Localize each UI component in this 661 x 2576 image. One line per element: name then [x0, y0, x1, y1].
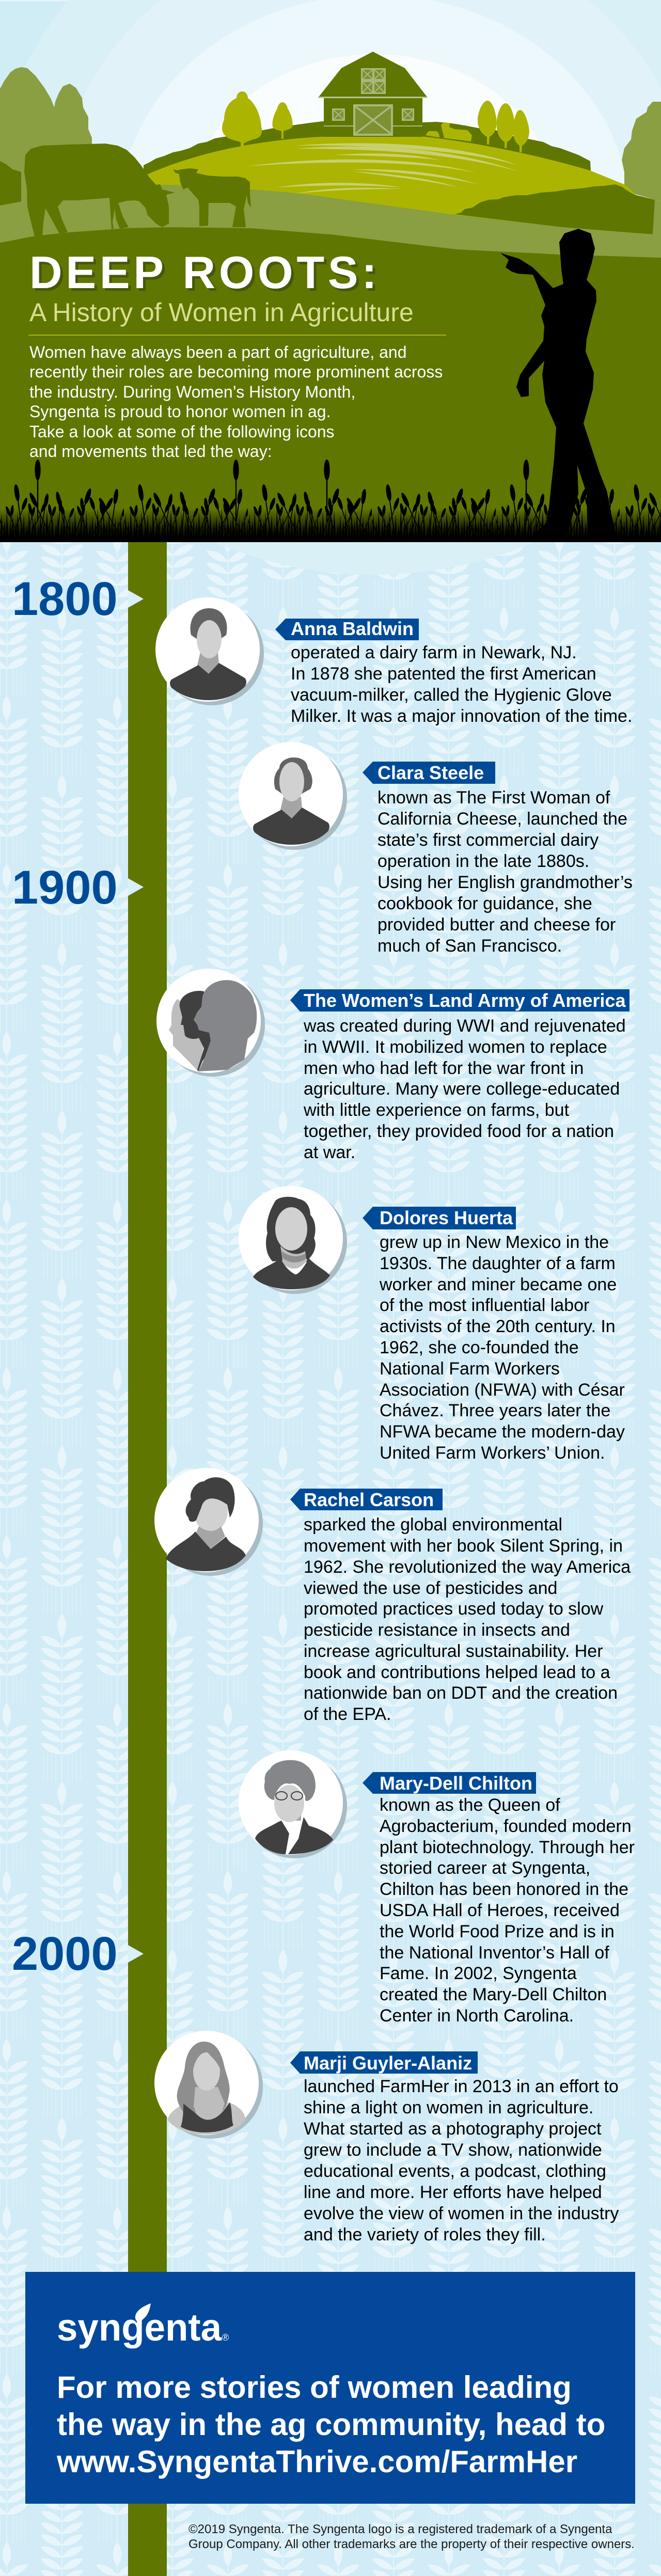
calf — [173, 168, 251, 227]
description: operation in the late 1880s. — [377, 851, 589, 871]
description: Center in North Carolina. — [380, 2006, 574, 2026]
back hedge on the hill — [144, 121, 591, 217]
description: agriculture. Many were college-educated — [304, 1079, 620, 1099]
year marker 1900: 1900 — [12, 861, 118, 914]
description: USDA Hall of Heroes, received — [380, 1901, 620, 1920]
name tag: Rachel Carson — [304, 1489, 434, 1510]
small distant animals — [426, 123, 472, 141]
description: Fame. In 2002, Syngenta — [380, 1964, 577, 1983]
description: grew up in New Mexico in the — [380, 1232, 609, 1252]
call to action panel — [25, 2272, 635, 2504]
barn loft window — [361, 68, 386, 94]
header farm scene — [0, 0, 661, 575]
description: Using her English grandmother’s — [377, 873, 633, 892]
description: 1962, she co-founded the — [380, 1338, 579, 1357]
description: National Farm Workers — [380, 1359, 560, 1379]
intro text: the industry. During Women’s History Month, — [29, 383, 355, 401]
description: book and contributions helped lead to a — [304, 1663, 610, 1682]
name tag: The Women’s Land Army of America — [304, 990, 626, 1011]
description: shine a light on women in agriculture. — [304, 2098, 593, 2117]
description: operated a dairy farm in Newark, NJ. — [291, 643, 577, 662]
left hedge — [0, 161, 21, 206]
lime hill field — [145, 136, 640, 245]
description: the World Food Prize and is in — [380, 1922, 615, 1941]
right background tree — [622, 102, 661, 201]
description: What started as a photography project — [304, 2119, 602, 2139]
Syngenta logo: syngenta — [57, 2306, 222, 2349]
barn — [318, 52, 428, 137]
description: much of San Francisco. — [377, 936, 562, 956]
description: worker and miner became one — [379, 1275, 617, 1294]
description: of the most influential labor — [380, 1295, 589, 1315]
description: activists of the 20th century. In — [380, 1317, 616, 1336]
call to action text: the way in the ag community, head to — [57, 2407, 605, 2442]
description: cookbook for guidance, she — [377, 894, 592, 913]
description: 1930s. The daughter of a farm — [380, 1254, 616, 1273]
description: Milker. It was a major innovation of the time. — [291, 706, 632, 726]
description: at war. — [304, 1143, 355, 1162]
year marker 2000: 2000 — [12, 1927, 118, 1980]
description: increase agricultural sustainability. Her — [304, 1641, 603, 1661]
call to action text — [56, 2370, 605, 2479]
entry: Clara Steele — [239, 742, 633, 956]
description: United Farm Workers’ Union. — [380, 1443, 605, 1463]
description: known as The First Woman of — [377, 788, 610, 808]
description: Association (NFWA) with César — [380, 1380, 625, 1400]
left background trees — [0, 67, 92, 248]
description: with little experience on farms, but — [303, 1100, 570, 1120]
intro text: recently their roles are becoming more prominent across — [29, 362, 443, 381]
description — [304, 2077, 619, 2245]
portrait: Mary-Dell Chilton — [239, 1750, 347, 1858]
description: and the variety of roles they fill. — [304, 2225, 546, 2245]
name tag: Marji Guyler-Alaniz — [304, 2052, 472, 2074]
title: DEEP ROOTS: — [32, 249, 383, 301]
trees right of barn — [478, 101, 529, 152]
description: promoted practices used today to slow — [304, 1599, 604, 1619]
entry: The Women's Land Army of America — [156, 969, 629, 1162]
name tag: Clara Steele — [377, 762, 484, 783]
portrait: Anna Baldwin — [155, 597, 264, 705]
entry: Anna Baldwin — [155, 597, 632, 726]
intro text: Take a look at some of the following icons — [29, 422, 335, 441]
description — [303, 1016, 626, 1162]
description: sparked the global environmental — [304, 1515, 562, 1535]
name tag: Dolores Huerta — [380, 1207, 513, 1228]
description: state’s first commercial dairy — [377, 830, 599, 850]
copyright: Group Company. All other trademarks are the property of their respective owners. — [188, 2537, 635, 2551]
description: grew to include a TV show, nationwide — [304, 2140, 602, 2160]
timeline bar — [128, 542, 167, 2576]
intro text: Women have always been a part of agriculture, and — [29, 343, 407, 361]
description: viewed the use of pesticides and — [304, 1578, 557, 1598]
tree left of barn — [222, 91, 293, 146]
large grazing cow — [24, 144, 175, 236]
sky with concentric light arcs — [0, 0, 661, 575]
description: plant biotechnology. Through her — [380, 1838, 635, 1857]
entry: Marji Guyler-Alaniz — [154, 2031, 619, 2245]
portrait: Marji Guyler-Alaniz — [154, 2031, 263, 2139]
call to action text: For more stories of women leading — [57, 2370, 572, 2405]
timeline background with wheat pattern — [0, 542, 661, 2576]
right hedge — [455, 184, 655, 234]
name tag: Mary-Dell Chilton — [380, 1773, 532, 1794]
description: California Cheese, launched the — [377, 809, 627, 829]
intro text: and movements that led the way: — [29, 442, 272, 461]
barn door — [353, 104, 393, 136]
description: in WWII. It mobilized women to replace — [304, 1037, 607, 1057]
description: evolve the view of women in the industry — [304, 2204, 619, 2223]
front dark hill — [0, 227, 661, 542]
description: together, they provided food for a nation — [304, 1121, 614, 1141]
entry: Dolores Huerta — [239, 1186, 625, 1463]
copyright — [188, 2522, 635, 2551]
barn side windows — [332, 108, 414, 121]
description: nationwide ban on DDT and the creation — [304, 1683, 618, 1703]
description: movement with her book Silent Spring, in — [304, 1536, 623, 1556]
description: 1962. She revolutionized the way America — [304, 1557, 631, 1577]
description: In 1878 she patented the first American — [291, 664, 596, 684]
description — [380, 1795, 635, 2026]
Syngenta logo: ® — [222, 2332, 229, 2343]
intro text — [29, 343, 443, 461]
portrait: Clara Steele — [239, 742, 347, 850]
description: created the Mary-Dell Chilton — [380, 1985, 607, 2004]
intro text: Syngenta is proud to honor women in ag. — [29, 402, 330, 421]
glasses — [276, 1792, 303, 1800]
woman silhouette pointing — [500, 229, 617, 541]
description — [379, 1232, 625, 1463]
description: of the EPA. — [304, 1704, 391, 1724]
title: DEEP ROOTS: — [29, 247, 380, 298]
description: Chávez. Three years later the — [380, 1401, 610, 1420]
description: NFWA became the modern-day — [380, 1422, 625, 1442]
description: pesticide resistance in insects and — [304, 1620, 570, 1640]
description: was created during WWI and rejuvenated — [303, 1016, 626, 1036]
description: Agrobacterium, founded modern — [380, 1816, 632, 1836]
description — [377, 788, 633, 956]
portrait: Rachel Carson — [154, 1468, 263, 1576]
description: men who had left for the war front in — [304, 1058, 584, 1078]
description — [291, 643, 632, 726]
entry: Mary-Dell Chilton — [239, 1750, 635, 2026]
field streaks — [247, 143, 520, 194]
portrait: Dolores Huerta — [239, 1186, 347, 1294]
entry: Rachel Carson — [154, 1468, 631, 1724]
description: known as the Queen of — [380, 1795, 560, 1815]
description: storied career at Syngenta, — [380, 1858, 590, 1878]
grass and wheat silhouette — [0, 460, 661, 542]
copyright: ©2019 Syngenta. The Syngenta logo is a registered trademark of a Syngenta — [188, 2522, 612, 2536]
description: educational events, a podcast, clothing — [304, 2161, 606, 2181]
call to action text: www.SyngentaThrive.com/FarmHer — [56, 2444, 577, 2479]
description: Chilton has been honored in the — [380, 1879, 628, 1899]
description: launched FarmHer in 2013 in an effort to — [304, 2077, 619, 2096]
subtitle: A History of Women in Agriculture — [29, 298, 414, 327]
name tag: Anna Baldwin — [291, 618, 414, 639]
description: the National Inventor’s Hall of — [380, 1943, 609, 1963]
description — [304, 1515, 631, 1724]
description: vacuum-milker, called the Hygienic Glove — [291, 685, 612, 705]
middle grass band — [0, 185, 661, 274]
portrait: three profiles — [156, 969, 265, 1077]
description: provided butter and cheese for — [377, 915, 616, 935]
year marker 1800: 1800 — [12, 573, 118, 625]
description: line and more. Her efforts have helped — [304, 2183, 602, 2202]
